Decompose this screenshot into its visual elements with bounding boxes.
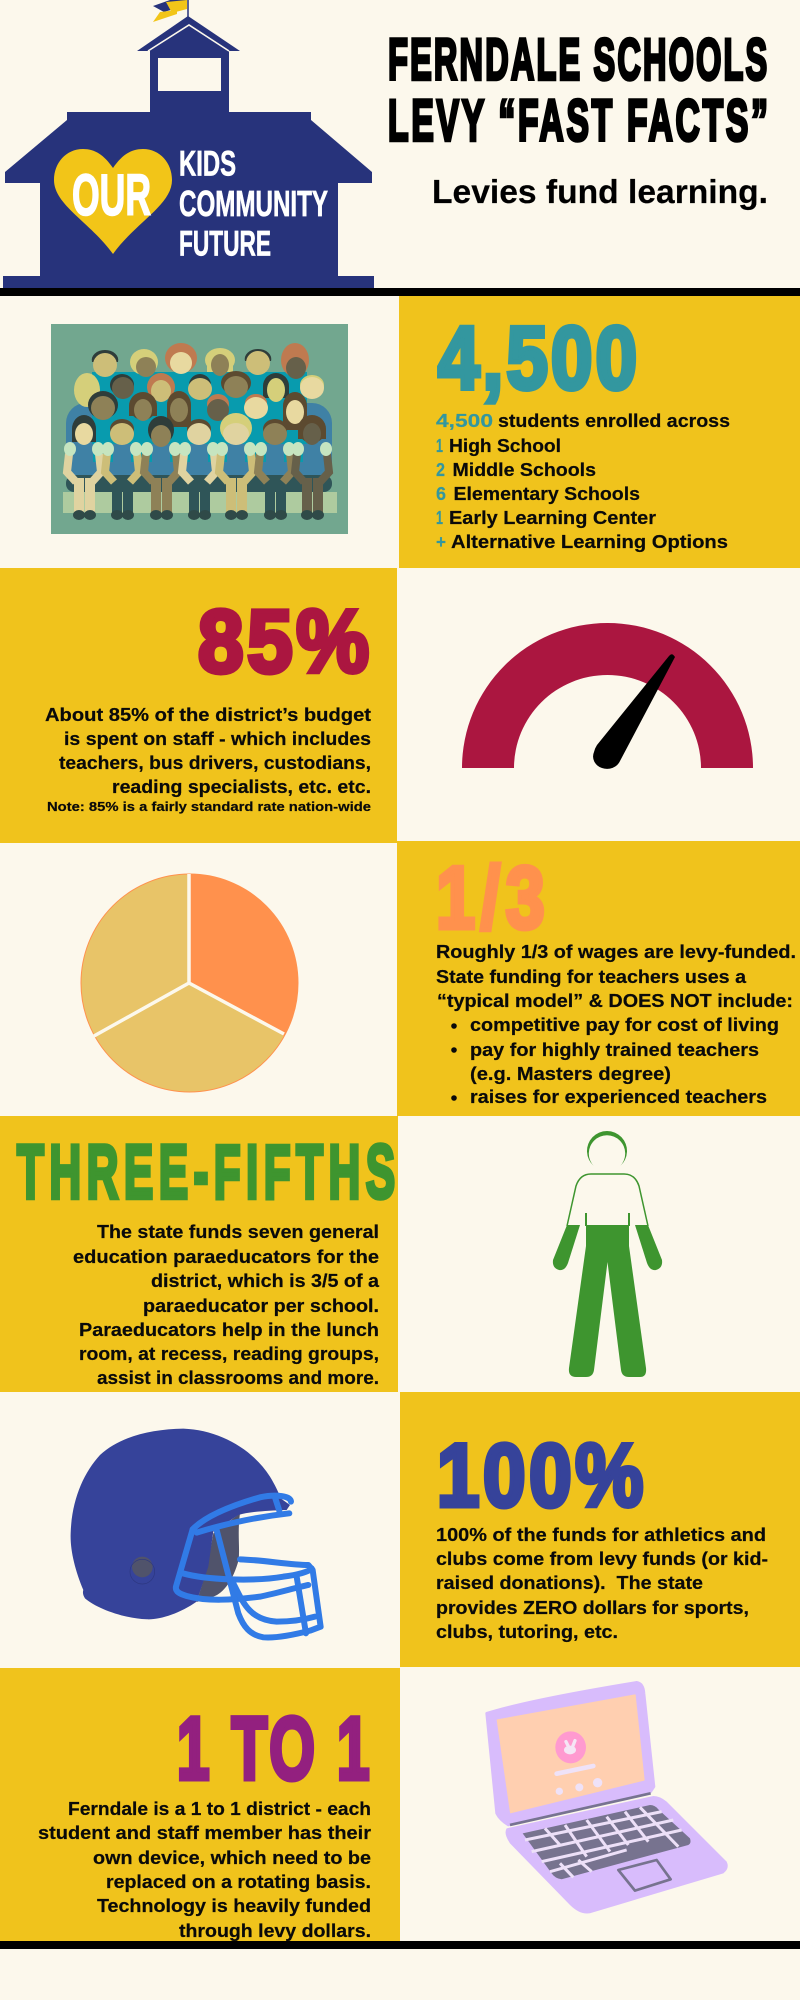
text block: enrollment: Alternative Learning Options <box>451 532 728 552</box>
text block: enrollment: 4,500 <box>436 411 493 431</box>
text block: enrollment: + <box>436 532 446 552</box>
text block: paraeducators: district, which is 3/5 of a <box>151 1271 380 1291</box>
text block: enrollment <box>436 411 730 552</box>
stat: 1 to 1: 1 TO 1 <box>177 1699 370 1798</box>
text block: enrollment: students enrolled across <box>498 411 730 431</box>
helmet shell <box>71 1429 290 1619</box>
panel: header logo schoolhouse: OUR <box>72 163 151 228</box>
text block: wages <box>436 942 796 1107</box>
keyboard <box>523 1805 691 1879</box>
text block: wages: Roughly 1/3 of wages are levy-funded. <box>436 942 796 962</box>
face mask <box>176 1496 321 1637</box>
icon: person three-fifths filled <box>553 1131 662 1377</box>
text block: wages: pay for highly trained teachers <box>470 1040 759 1060</box>
text block: staff budget: teachers, bus drivers, custodians, <box>59 753 371 773</box>
third row heads <box>88 391 307 430</box>
gauge needle <box>593 654 675 769</box>
text block: staff budget: is spent on staff - which includes <box>64 729 371 749</box>
text block: staff budget: Note: 85% is a fairly standard rate nation-wide <box>47 799 371 814</box>
header divider bar <box>0 288 800 296</box>
text block: wages: State funding for teachers uses a <box>436 967 747 987</box>
title <box>388 26 768 154</box>
text block: paraeducators: paraeducator per school. <box>143 1296 379 1316</box>
text block: wages: raises for experienced teachers <box>470 1087 767 1107</box>
panel: header logo schoolhouse <box>3 0 374 288</box>
front seated row <box>64 413 332 520</box>
text block: devices: Ferndale is a 1 to 1 district - each <box>68 1799 371 1819</box>
panel: header logo schoolhouse: KIDS <box>179 144 236 184</box>
text block: devices: through levy dollars. <box>179 1921 371 1941</box>
text block: athletics: clubs, tutoring, etc. <box>436 1622 618 1642</box>
illustration: football helmet <box>71 1429 321 1637</box>
text block: paraeducators <box>73 1222 380 1388</box>
text block: devices: own device, which need to be <box>93 1848 371 1868</box>
text block: paraeducators: room, at recess, reading groups, <box>79 1344 379 1364</box>
chart: pie one third <box>81 874 298 1092</box>
chart: gauge at 85 percent <box>462 623 753 769</box>
stat: 100%: 100% <box>437 1426 643 1525</box>
stat: three-fifths: THREE-FIFTHS <box>17 1131 395 1215</box>
text block: devices: replaced on a rotating basis. <box>106 1872 371 1892</box>
panel: header logo schoolhouse: COMMUNITY <box>179 183 328 224</box>
panel: header logo schoolhouse: FUTURE <box>179 224 271 264</box>
text block: enrollment: 1 <box>436 436 443 456</box>
text block: athletics: clubs come from levy funds (or kid- <box>436 1549 768 1569</box>
text block: paraeducators: assist in classrooms and more. <box>97 1368 379 1388</box>
illustration: laptop <box>487 1682 728 1914</box>
back row and body blocks <box>66 343 332 492</box>
text block: wages: “typical model” & DOES NOT include: <box>437 991 793 1011</box>
text block: staff budget: About 85% of the district’s budget <box>45 705 371 725</box>
text block: devices: student and staff member has their <box>38 1823 371 1843</box>
text block: enrollment: 1 <box>436 508 443 528</box>
text block: staff budget <box>45 705 371 814</box>
text block: paraeducators: The state funds seven general <box>97 1222 379 1242</box>
text block: paraeducators: Paraeducators help in the lunch <box>79 1320 379 1340</box>
title: FERNDALE SCHOOLS <box>388 26 767 92</box>
text block: enrollment: 2 <box>436 460 445 480</box>
stat: 85%: 85% <box>198 593 369 692</box>
text block: athletics: 100% of the funds for athletics and <box>436 1525 766 1545</box>
stat: 1/3: 1/3 <box>436 848 545 947</box>
text block: enrollment: Early Learning Center <box>449 508 656 528</box>
title: LEVY “FAST FACTS” <box>388 89 768 154</box>
text block: enrollment: 6 <box>436 484 446 504</box>
text block: devices: Technology is heavily funded <box>97 1896 371 1916</box>
illustration: group of students <box>51 324 348 534</box>
subtitle: Levies fund learning. <box>432 173 768 210</box>
text block: athletics <box>436 1525 768 1642</box>
footer divider bar <box>0 1941 800 1949</box>
text block: athletics: provides ZERO dollars for sports, <box>436 1598 749 1618</box>
text block: devices <box>38 1799 371 1941</box>
text block: staff budget: reading specialists, etc. etc. <box>112 777 371 797</box>
text block: enrollment: High School <box>449 436 561 456</box>
text block: wages: competitive pay for cost of living <box>470 1015 779 1035</box>
text block: paraeducators: education paraeducators for the <box>73 1247 379 1267</box>
text block: athletics: raised donations). The state <box>436 1573 703 1593</box>
second row heads <box>74 371 324 407</box>
text block: enrollment: Elementary Schools <box>454 484 640 504</box>
stat: 4,500: 4,500 <box>438 309 637 408</box>
text block: enrollment: Middle Schools <box>452 460 596 480</box>
text block: wages: (e.g. Masters degree) <box>470 1064 671 1084</box>
